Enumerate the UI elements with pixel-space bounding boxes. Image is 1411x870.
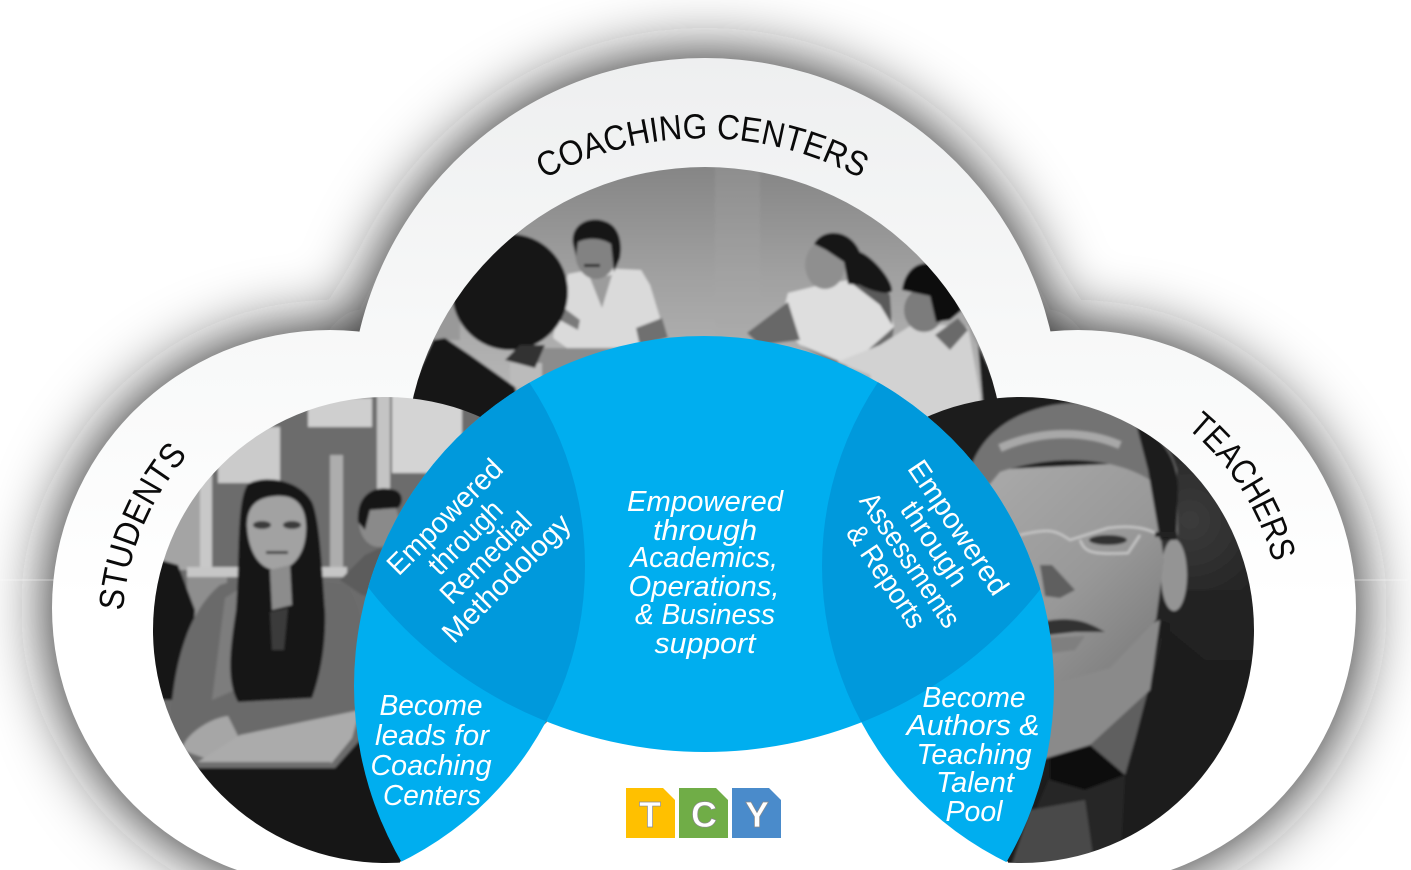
text: centre region: & Business (635, 599, 775, 631)
logo tile: Y: Y (745, 794, 769, 835)
person: second student behind (341, 486, 403, 596)
text: teachers overlap, rotated (829, 454, 1015, 650)
text: students overlap, rotated: Remedial (434, 506, 539, 611)
text: students lobe: Become (380, 690, 482, 722)
logo tile: T (626, 788, 675, 838)
text: centre region: support (654, 628, 758, 660)
glasses (1020, 527, 1160, 554)
person: main student with long hair (170, 478, 326, 758)
photo: students in classroom (153, 397, 547, 863)
text: centre region: Empowered (627, 486, 784, 518)
text: students overlap, rotated (375, 446, 578, 650)
text: students lobe: leads for (375, 720, 490, 752)
text: teachers lobe: Talent (936, 767, 1016, 799)
text: teachers lobe (904, 682, 1040, 828)
text: students lobe (370, 690, 492, 812)
region: light blue lobes (354, 336, 1054, 862)
jacket and shirt (1011, 648, 1159, 863)
region: darker overlaps (368, 382, 1040, 722)
text: centre region: through (653, 515, 757, 547)
mouth (1040, 619, 1105, 636)
text: teachers lobe: Authors & (904, 710, 1040, 742)
photo: teacher portrait (928, 397, 1254, 863)
text: teachers overlap, rotated: & Reports (839, 519, 932, 634)
person: teacher in white shirt (553, 220, 668, 352)
text: students overlap, rotated: through (422, 494, 510, 582)
nose shadow (1040, 565, 1075, 598)
heading: students: STUDENTS (100, 444, 184, 609)
text: teachers lobe: Become (922, 682, 1026, 714)
face (985, 462, 1164, 682)
photo: coaching centers group discussion (413, 167, 997, 417)
faint edge lines (0, 579, 1408, 581)
panel: blue Venn overlap (354, 336, 1054, 862)
logo: TCY (626, 788, 781, 838)
text: teachers overlap, rotated: Assessments (853, 487, 966, 634)
heading: coaching centers: COACHING CENTERS (538, 114, 868, 176)
desk (193, 710, 360, 765)
text: centre region: Academics, (628, 542, 778, 574)
text: teachers overlap, rotated: through (894, 495, 974, 593)
text: centre region: Operations, (628, 571, 780, 603)
text: students overlap, rotated: Methodology (436, 508, 578, 650)
text: centre region (627, 486, 784, 660)
logo tile: C: C (691, 794, 717, 835)
panel: white gap below the centre region (400, 690, 1008, 870)
ear (1161, 539, 1187, 611)
person: boy in sweater (837, 263, 1005, 420)
text: teachers lobe: Pool (946, 796, 1004, 828)
logo tile: Y (732, 788, 781, 838)
person: woman in hoodie (747, 233, 894, 368)
neck (1040, 620, 1160, 760)
table (536, 346, 618, 376)
person: dark jacket at left edge (150, 557, 195, 700)
text: teachers overlap, rotated: Empowered (901, 454, 1015, 602)
text: students overlap, rotated: Empowered (381, 453, 510, 582)
hair (970, 403, 1178, 540)
logo tile: T: T (639, 794, 661, 835)
heading: teachers: TEACHERS (1192, 410, 1294, 560)
eyes (1089, 535, 1127, 545)
text: teachers lobe: Teaching (916, 739, 1032, 771)
text: students lobe: Centers (383, 780, 481, 812)
logo tile: C (679, 788, 728, 838)
person: man seen from behind (413, 233, 570, 417)
text: students lobe: Coaching (370, 750, 492, 782)
